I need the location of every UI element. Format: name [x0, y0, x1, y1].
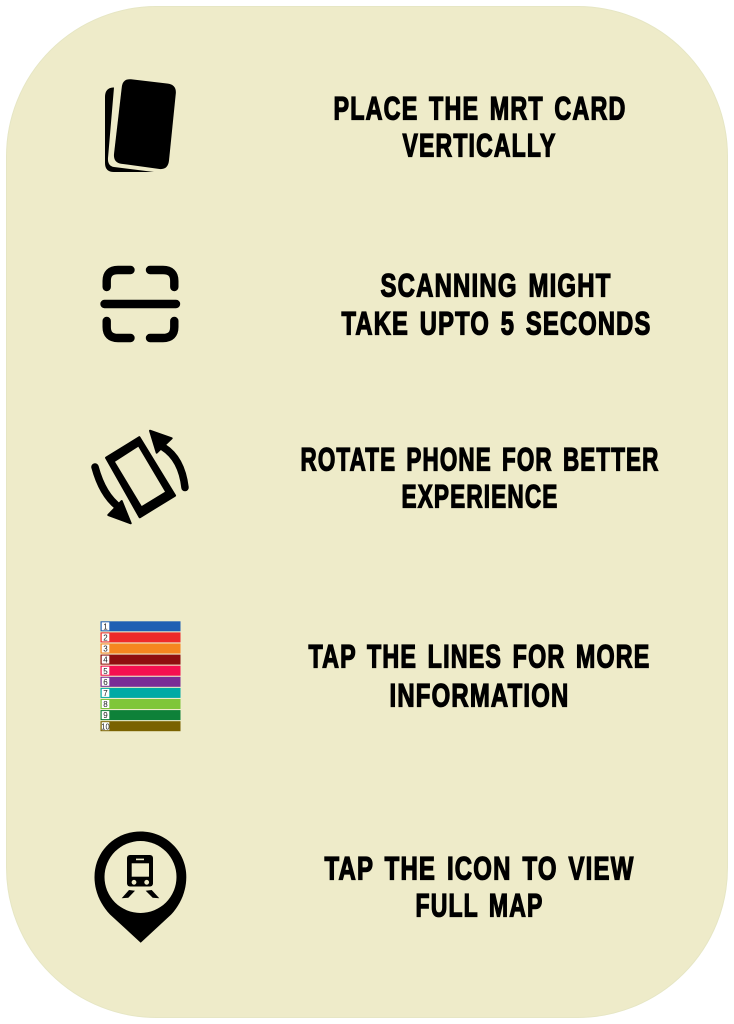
icon: line list: 10 — [101, 722, 110, 731]
icon: line list: 2 — [103, 634, 108, 642]
text: place the card: PLACE THE MRT CARD — [334, 90, 626, 126]
icon: map pin with train — [94, 832, 186, 943]
icon: line list: 9 — [103, 711, 108, 720]
text: scanning time — [342, 268, 652, 342]
text: rotate phone: EXPERIENCE — [402, 478, 558, 514]
icon: line list: 4 — [103, 656, 108, 665]
icon: line list — [100, 621, 180, 731]
icon: rotate phone — [95, 431, 185, 523]
text: place the card — [334, 90, 626, 164]
icon: line list: 5 — [103, 667, 108, 676]
text: tap the lines: INFORMATION — [390, 678, 570, 714]
icon: scan frame — [104, 270, 176, 338]
text: tap the icon: TAP THE ICON TO VIEW — [324, 850, 634, 886]
icon: line list: 7 — [103, 689, 108, 698]
icon: line list: 3 — [103, 645, 108, 654]
text: place the card: VERTICALLY — [402, 128, 556, 164]
text: rotate phone — [300, 442, 660, 514]
icon: line list: 6 — [103, 678, 108, 687]
text: tap the lines — [308, 638, 650, 714]
text: tap the icon — [324, 850, 634, 924]
text: tap the icon: FULL MAP — [416, 888, 544, 924]
icon: line list: 8 — [103, 700, 108, 709]
icon: line list: 1 — [103, 622, 108, 631]
text: scanning time: SCANNING MIGHT — [380, 268, 612, 304]
icon: cards — [105, 79, 176, 172]
